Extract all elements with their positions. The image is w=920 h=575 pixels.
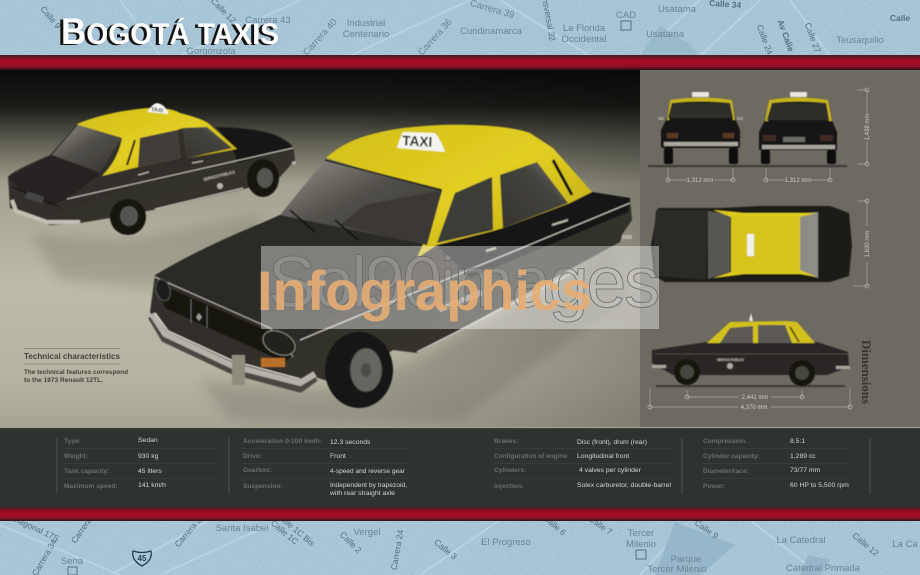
spec column 4: 8.5:1	[790, 438, 805, 445]
map background: bottom band: Milenio	[626, 539, 656, 550]
map background: bottom band: Carrera 31	[172, 511, 206, 549]
map background: top band: Usatama	[658, 4, 697, 15]
large taxi, front three-quarter view: SERVICIO PÚBLICO	[437, 288, 484, 314]
map background: top band: Calle 27	[803, 21, 823, 54]
dimension: wheelbase and length: 4,370 mm	[741, 405, 767, 411]
spec column 4: Diameter/race:	[703, 468, 749, 475]
map background: bottom band: Calle 12	[850, 530, 881, 558]
spec column 3: Configuration of engine:	[494, 453, 569, 460]
spec column 1: Maximum speed:	[64, 483, 118, 490]
dimension: track widths and height: 1,312 mm	[687, 178, 713, 184]
spec column 1: 45 liters	[138, 468, 162, 475]
spec column 4: Power:	[703, 483, 725, 490]
dimension: vehicle width	[853, 199, 871, 288]
spec column 3: Longitudinal front	[577, 453, 629, 460]
map background: bottom band: Calle 3	[432, 537, 459, 562]
dimension: track widths and height	[666, 88, 871, 184]
map background: top band: Industrial	[347, 18, 385, 29]
panel: technical specifications table	[0, 428, 920, 508]
map background: bottom band	[0, 510, 920, 575]
spec column 1: Tank capacity:	[64, 468, 109, 475]
map background: bottom band: Catedral Primada	[786, 563, 861, 574]
side elevation view: SERVICIO PÚBLICO	[717, 357, 744, 362]
small taxi, rear three-quarter view: SERVICIO PÚBLICO	[203, 169, 236, 182]
map background: bottom band: Diagonal 17S	[10, 513, 61, 544]
spec column 2: with rear straight axle	[329, 490, 395, 497]
dimension: track widths and height: 1,438 mm	[865, 114, 871, 140]
spec column 3: Injection:	[494, 483, 523, 490]
panel: main render with two taxis	[0, 70, 640, 428]
text block: technical characteristics note	[24, 348, 128, 384]
map background: bottom band: La Ca	[892, 539, 918, 550]
map background: bottom band: Calle 1C	[269, 518, 300, 547]
spec column 3: Brakes:	[494, 438, 518, 445]
small taxi, rear three-quarter view	[8, 103, 296, 235]
map background: bottom band: Calle 9	[693, 517, 720, 541]
map background: top band: Cundinamarca	[460, 26, 523, 37]
map background: top band: Carrera 36	[416, 17, 455, 58]
text block: technical characteristics note: to the 1973 Renault 12TL.	[24, 378, 103, 384]
map background: bottom band: Carrera	[69, 516, 94, 545]
map background: top band: Carrera 40	[301, 17, 340, 58]
map background: top band: Occidental	[562, 34, 606, 45]
spec column 1: Weight:	[64, 453, 88, 460]
spec column 3: Disc (front), drum (rear)	[577, 439, 647, 446]
map background: bottom band: Vergel	[354, 527, 380, 538]
panel: dimensions blueprint	[640, 70, 920, 428]
map background: bottom band: Tercer	[628, 528, 654, 539]
spec column 2: Drive:	[243, 453, 262, 460]
spec column 4: Cylinder capacity:	[703, 453, 760, 460]
map background: bottom band: La Catedral	[776, 535, 826, 546]
side elevation view	[652, 313, 850, 387]
taxi roof sign, large car	[397, 132, 445, 152]
watermark: Sol90images	[268, 243, 660, 323]
spec column 4: 60 HP to 5,500 rpm	[790, 482, 849, 489]
spec column 1: 930 kg	[138, 453, 159, 460]
spec column 3: Cylinders:	[494, 467, 526, 474]
map background: top band: Gorgonzola	[186, 46, 236, 57]
title: BOGOTÁ TAXIS	[61, 11, 279, 52]
dimension: wheelbase and length	[648, 387, 852, 411]
taxi roof sign, small car: TAXI	[151, 107, 164, 114]
map background: top band: Usatama	[646, 29, 685, 40]
map background: bottom band: Carrera 24	[389, 529, 406, 571]
map background: top band: Calle 24	[755, 23, 775, 56]
large taxi, front three-quarter view	[150, 125, 632, 408]
text block: technical characteristics note: The technical features correspond	[24, 370, 128, 376]
map background: top band	[0, 0, 920, 58]
map background: bottom band: El Progreso	[481, 537, 531, 548]
map background: bottom band: Calle 2	[338, 529, 364, 555]
spec column 2: 12.3 seconds	[330, 439, 371, 446]
spec column 1: Sedan	[138, 437, 158, 444]
spec column 2: Gearbox:	[243, 467, 272, 474]
spec column 1: 141 km/h	[138, 482, 166, 489]
dimension: wheelbase and length: 2,441 mm	[742, 395, 768, 401]
spec column 2	[243, 438, 407, 497]
spec column 3: 4 valves per cylinder	[579, 467, 642, 474]
floor reflections	[30, 215, 625, 425]
text block: technical characteristics note: Technical characteristics	[24, 352, 121, 361]
map background: top band: CAD	[616, 10, 636, 21]
dimension: track widths and height: 1,312 mm	[785, 178, 811, 184]
map background: bottom band: Santa Isabel	[216, 523, 268, 534]
bottom red band	[0, 507, 920, 521]
taxi roof sign, small car	[148, 103, 168, 114]
spec column 4: 73/77 mm	[790, 467, 821, 474]
spec column 4: 1,289 cc	[790, 453, 816, 460]
rear elevation view	[759, 92, 837, 164]
taxi roof sign, large car: TAXI	[402, 132, 433, 150]
spec column 4: Compression:	[703, 438, 747, 445]
front elevation view	[648, 92, 847, 167]
icon: route 45 shield: 45	[138, 554, 147, 563]
map background: bottom band: Sena	[61, 556, 84, 567]
watermark: Infographics	[257, 259, 592, 322]
spec column 2: 4-speed and reverse gear	[330, 468, 406, 475]
map background: top band: Calle 9	[38, 4, 63, 31]
top red band	[0, 55, 920, 70]
spec column 2: Suspension:	[243, 483, 283, 490]
map background: top band: Teusaquillo	[836, 35, 884, 46]
map background: top band: Centenario	[343, 29, 389, 40]
map background: top band: Carrera 43	[245, 15, 291, 26]
dimension: vehicle width: 1,630 mm	[865, 231, 871, 257]
spec column 4	[703, 438, 849, 490]
spec column 3: Solex carburetor, double-barrel	[577, 482, 671, 489]
top plan view	[651, 206, 852, 282]
icon: route 45 shield	[133, 551, 151, 566]
spec column 2: Front	[330, 453, 346, 460]
map background: bottom band: Parque	[671, 554, 701, 565]
spec column 3	[494, 438, 671, 490]
spec column 2: Acceleration 0-100 km/h:	[243, 438, 322, 445]
spec column 2: Independent by trapezoid,	[330, 482, 407, 489]
title: BOGOTÁ TAXIS	[58, 12, 276, 53]
map background: top band: Calle	[890, 13, 910, 23]
map background: bottom band: Tercer Milenio	[647, 564, 707, 575]
map background: bottom band: Calle 6	[541, 513, 568, 538]
spec column 1: Type:	[64, 438, 81, 445]
spec column 1	[64, 437, 166, 490]
heading: dimensions: Dimensions	[859, 340, 874, 404]
map background: top band: Av Calle	[776, 18, 796, 53]
map background: top band: La Florida	[563, 23, 606, 34]
map background: bottom band: Calle 1C Bis	[275, 510, 317, 548]
map background: bottom band: Calle 7	[587, 513, 614, 537]
